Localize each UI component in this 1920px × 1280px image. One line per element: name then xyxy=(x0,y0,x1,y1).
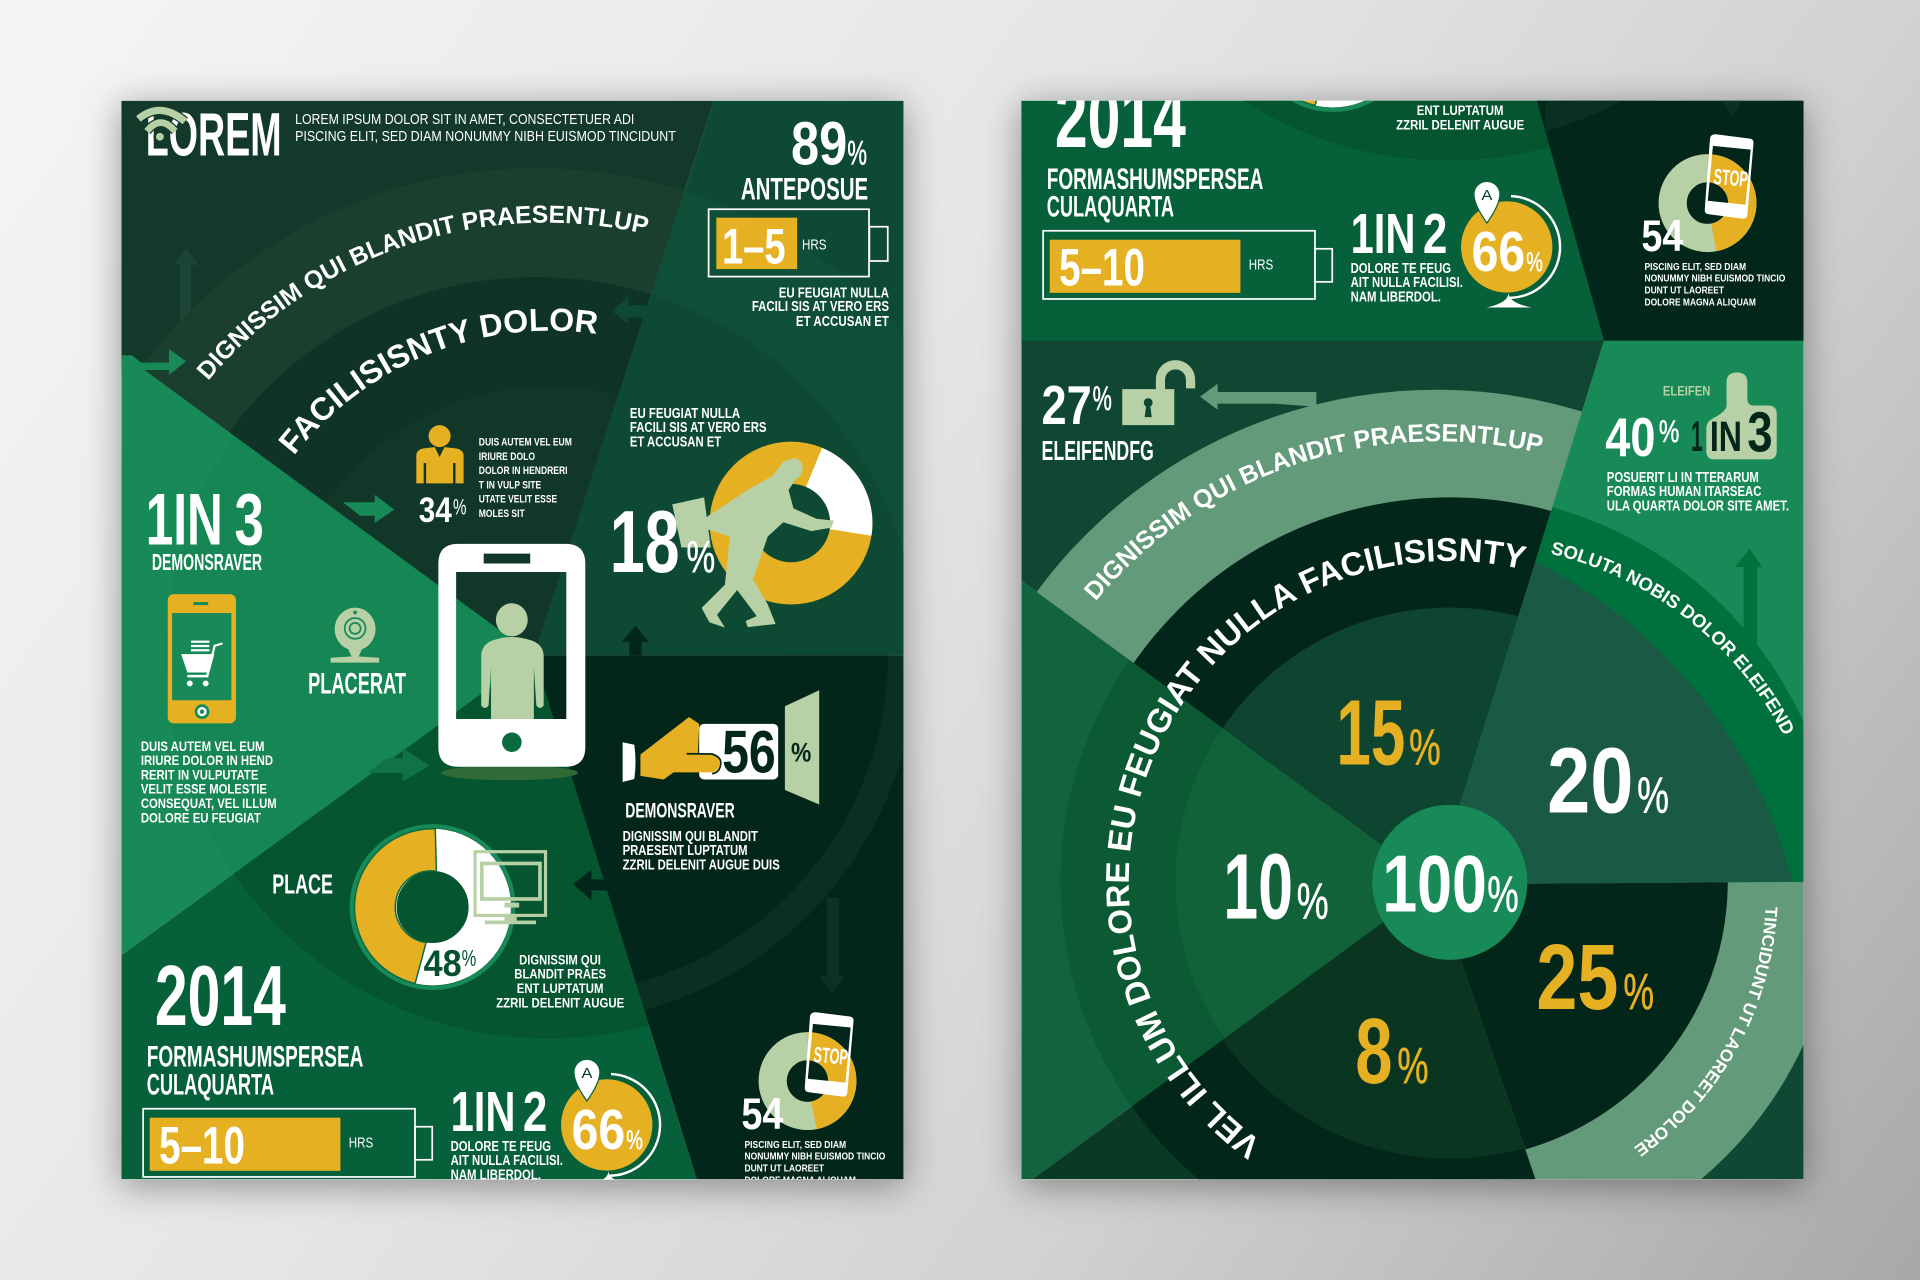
stat: 89% anteposue xyxy=(741,122,868,200)
battery: 5-10 hrs xyxy=(1043,231,1332,299)
chart: 54% donut with stop phone: STOP xyxy=(1713,164,1749,192)
chart centre: 100%: % xyxy=(1487,865,1519,923)
stat: 15%: % xyxy=(1409,717,1441,775)
battery: 5-10 hrs: HRS xyxy=(349,1136,373,1152)
icon: hand with 56% card: 56 xyxy=(722,718,776,785)
stat: 1 in 2: AIT NULLA FACILISI. xyxy=(451,1153,563,1169)
stat: 34%: 34 xyxy=(419,490,452,530)
stat: 18%: 18 xyxy=(610,492,680,591)
text: demonsraver block xyxy=(622,803,780,870)
stat: 1 in 2 xyxy=(1351,202,1463,305)
heading: formas xyxy=(147,1041,363,1101)
chart: donut with carrying man xyxy=(672,448,872,628)
stat: 27% xyxy=(1042,374,1154,466)
background wedge: lower right darkest xyxy=(544,655,904,1180)
text: demonsraver block: DIGNISSIM QUI BLANDIT xyxy=(623,829,758,845)
icon: globe with 66%: A xyxy=(1481,188,1493,204)
background wedge: lower right ring sector xyxy=(1021,341,1839,1271)
text: piscing small: PISCING ELIT, SED DIAM xyxy=(744,1140,846,1151)
text: eu feugiat right: EU FEUGIAT NULLA xyxy=(779,285,889,301)
stat: 27%: ELEIFENDFG xyxy=(1042,435,1154,466)
stat: 25%: % xyxy=(1623,962,1654,1020)
icon: open padlock xyxy=(1122,365,1191,425)
stat: 1 in 2: AIT NULLA FACILISI. xyxy=(1351,275,1463,291)
heading: 2014: 2014 xyxy=(1055,70,1186,166)
background wedge: upper right xyxy=(538,100,904,656)
background wedge: top ring sector xyxy=(1021,341,1834,1266)
battery: 5-10 hrs: HRS xyxy=(1249,258,1273,274)
text: demonsraver block: DEMONSRAVER xyxy=(625,800,735,823)
stat: 54%: % xyxy=(1684,226,1700,248)
icon: wifi xyxy=(138,110,185,142)
stat: 89% anteposue: 89 xyxy=(791,109,847,177)
background wedge: bottom ring sector xyxy=(1021,341,1839,1271)
stat: 25%: 25 xyxy=(1536,925,1618,1029)
text: duis autem small: MOLES SIT xyxy=(479,508,525,520)
text: duis autem paragraph: DOLORE EU FEUGIAT xyxy=(141,810,261,825)
stat: 40%: 40 xyxy=(1605,406,1656,468)
icon: thumb tag xyxy=(1706,372,1777,459)
arrow: left dark xyxy=(612,297,647,323)
continued poster content from the left sheet xyxy=(1043,0,1785,308)
stat: 20%: % xyxy=(1637,765,1669,823)
arrow: faint up right xyxy=(818,350,840,402)
text: eleifen: ELEIFEN xyxy=(1663,383,1710,398)
text: duis autem paragraph: CONSEQUAT, VEL ILLUM xyxy=(141,796,277,811)
stat: 34% xyxy=(419,497,466,522)
battery: 5-10 hrs: 5–10 xyxy=(1059,239,1145,298)
label: placerat: PLACERAT xyxy=(308,667,406,700)
text: dignissim qui centre: BLANDIT PRAES xyxy=(514,966,606,982)
heading: formas: CULAQUARTA xyxy=(147,1068,274,1101)
background: top right dark wedge xyxy=(1537,101,1804,341)
heading: 2014: 2014 xyxy=(155,948,286,1044)
background wedge: top dark xyxy=(121,100,714,644)
icon: gold phone with cart xyxy=(168,594,236,723)
battery: 5-10 hrs: 5–10 xyxy=(159,1116,245,1175)
text: duis autem paragraph xyxy=(141,739,277,825)
text: eu feugiat right: FACILI SIS AT VERO ERS xyxy=(752,299,889,315)
icon: webcam xyxy=(331,608,379,663)
stat: 15%: 15 xyxy=(1336,680,1405,784)
text: dignissim qui remnant: ENT LUPTATUM xyxy=(1417,102,1503,118)
arrow: to lock xyxy=(1200,384,1316,410)
background wedge: left ring sector xyxy=(1021,341,1839,1271)
icon: person gold xyxy=(416,425,464,483)
text: duis autem small: DUIS AUTEM VEL EUM xyxy=(479,436,572,448)
stat: 10%: 10 xyxy=(1223,835,1293,939)
stat: 1 in 2: 1IN xyxy=(451,1080,516,1143)
text: duis autem paragraph: RERIT IN VULPUTATE xyxy=(141,767,258,782)
chart centre: 100%: 100 xyxy=(1382,840,1487,930)
icon: main phone xyxy=(438,544,585,780)
stat: 1 in 2: DOLORE TE FEUG xyxy=(1351,261,1451,277)
text: duis autem small xyxy=(479,436,572,520)
background wedge: left bright green xyxy=(121,356,509,955)
chart: 54% donut with stop phone: STOP xyxy=(813,1042,849,1070)
battery: 1-5 hrs xyxy=(709,209,888,277)
curved heading: vel illum: VEL ILLUM DOLORE EU FEUGIAT NULLA FACILISISNTY xyxy=(1106,538,1527,1160)
text: piscing small: NONUMMY NIBH EUISMOD TINCIO xyxy=(744,1152,885,1163)
stat: 20%: 20 xyxy=(1547,728,1633,832)
logo: LOREM: LOREM xyxy=(146,101,282,169)
heading: formas: FORMASHUMSPERSEA xyxy=(147,1041,363,1074)
stat: 27%: % xyxy=(1093,380,1112,418)
text: piscing small: NONUMMY NIBH EUISMOD TINCIO xyxy=(1644,274,1785,285)
battery: 5-10 hrs xyxy=(143,1109,432,1177)
battery: 1-5 hrs: 1–5 xyxy=(722,218,786,274)
text: piscing small: DOLORE MAGNA ALIQUAM xyxy=(1644,297,1756,308)
header text: PISCING ELIT, SED DIAM NONUMMY NIBH EUISMOD TINCIDUNT xyxy=(295,128,676,145)
text: dignissim qui remnant: ZZRIL DELENIT AUGUE xyxy=(1396,116,1524,132)
stat: 1 in 2 xyxy=(451,1080,563,1183)
chart: 48% donut with monitor: % xyxy=(462,945,476,971)
text: piscing small: DOLORE MAGNA ALIQUAM xyxy=(744,1175,856,1186)
curved label: tincidunt: TINCIDUNT UT LAOREET DOLORE xyxy=(1634,907,1778,1157)
arrow: green up xyxy=(1735,549,1762,652)
arrow: green right top xyxy=(121,349,186,375)
header text: LOREM IPSUM DOLOR SIT IN AMET, CONSECTETUER ADI xyxy=(295,111,634,128)
text: duis autem small: UTATE VELIT ESSE xyxy=(479,494,557,506)
stat: 40%: % xyxy=(1659,413,1679,449)
text: duis autem paragraph: VELIT ESSE MOLESTIE xyxy=(141,782,267,797)
stat: 1 in 3 xyxy=(148,494,262,570)
icon: globe with 66%: % xyxy=(1526,247,1543,277)
stat: 1 in 3: DEMONSRAVER xyxy=(152,549,262,575)
header text xyxy=(296,114,676,143)
arrow: faint down xyxy=(1719,20,1745,115)
text: piscing small: DUNT UT LAOREET xyxy=(744,1164,825,1175)
stat: 1 in 2: NAM LIBERDOL. xyxy=(1351,289,1441,305)
text: eu feugiat centre: ET ACCUSAN ET xyxy=(630,434,721,450)
stat: 1 in 3: 3 xyxy=(234,477,264,560)
text: piscing small xyxy=(744,1140,885,1186)
text: posuerit xyxy=(1607,470,1789,514)
curved heading: facilisisnty: FACILISISNTY DOLOR xyxy=(278,308,597,454)
stat: 1 in 3 dark: 3 xyxy=(1747,401,1773,464)
stat: 1 in 2: 2 xyxy=(523,1080,547,1143)
stat: 1 in 3 dark: IN xyxy=(1710,413,1742,461)
chart centre: 100% xyxy=(1372,805,1527,960)
arrow: faint down xyxy=(819,898,845,993)
icon: globe with 66%: A xyxy=(581,1066,593,1082)
text: eu feugiat centre xyxy=(630,408,766,446)
text: duis autem small: T IN VULP SITE xyxy=(479,479,541,491)
icon: hand with 56% card: % xyxy=(791,738,811,768)
chart: 48% donut remnant xyxy=(1252,0,1413,110)
text: eu feugiat centre: EU FEUGIAT NULLA xyxy=(630,406,740,422)
text: dignissim qui centre: ZZRIL DELENIT AUGUE xyxy=(496,994,624,1010)
text: dignissim qui remnant xyxy=(1396,88,1524,132)
stat: 27%: 27 xyxy=(1042,374,1092,436)
stat: 89% anteposue: % xyxy=(847,134,867,172)
stat: 1 in 3 dark xyxy=(1691,401,1773,464)
stat: 8%: % xyxy=(1397,1036,1428,1094)
stat: 1 in 2: 1IN xyxy=(1351,202,1416,265)
heading: formas: FORMASHUMSPERSEA xyxy=(1047,163,1263,196)
curved label: soluta: SOLUTA NOBIS DOLOR ELEIFEND xyxy=(1551,542,1793,734)
arrow: green to person xyxy=(343,495,394,523)
background wedge: bottom green xyxy=(121,668,697,1180)
arrow: to phone xyxy=(367,748,430,781)
text: dignissim qui centre: ENT LUPTATUM xyxy=(517,980,603,996)
chart: 48% donut with monitor: 48 xyxy=(424,943,462,984)
stat: 34%: % xyxy=(453,494,467,519)
heading: formas xyxy=(1047,163,1263,223)
stat: 54%: 54 xyxy=(1641,212,1684,261)
curved heading: dignissim: DIGNISSIM QUI BLANDIT PRAESENTLUP xyxy=(196,205,648,380)
stat: 1 in 3: 1IN xyxy=(146,477,223,560)
text: demonsraver block: ZZRIL DELENIT AUGUE DUIS xyxy=(623,857,780,873)
icon: globe with 66% xyxy=(561,1059,660,1186)
icon: globe with 66%: 66 xyxy=(572,1098,625,1161)
percent sign: 18%: % xyxy=(686,533,715,582)
stat: 1 in 2: 2 xyxy=(1423,202,1447,265)
stat: 1 in 3 dark: 1 xyxy=(1691,413,1703,461)
icon: hand with 56% card xyxy=(623,690,819,804)
chart: 54% donut with stop phone xyxy=(1673,134,1756,251)
chart: 48% donut with monitor xyxy=(352,826,546,988)
text: eu feugiat right xyxy=(752,288,889,326)
stat: 10%: % xyxy=(1297,872,1329,930)
background: top green block xyxy=(1021,101,1804,342)
text: demonsraver block: PRAESENT LUPTATUM xyxy=(623,843,748,859)
text: piscing small: PISCING ELIT, SED DIAM xyxy=(1644,262,1746,273)
text: eu feugiat right: ET ACCUSAN ET xyxy=(796,314,889,330)
text: piscing small: DUNT UT LAOREET xyxy=(1644,286,1725,297)
stat: 1 in 2: DOLORE TE FEUG xyxy=(451,1139,551,1155)
label: place: PLACE xyxy=(272,869,333,900)
panel: left poster xyxy=(121,100,904,1180)
text: posuerit: POSUERIT LI IN TTERARUM xyxy=(1607,470,1759,486)
arrow: dark left xyxy=(573,870,609,900)
background: faint ring in dark wedge xyxy=(1545,101,1622,131)
stat: 8%: 8 xyxy=(1355,999,1392,1103)
text: dignissim qui remnant: BLANDIT PRAES xyxy=(1414,88,1506,104)
battery: 1-5 hrs: HRS xyxy=(802,237,827,253)
text: dignissim qui centre xyxy=(496,951,624,1010)
icon: globe with 66% xyxy=(1461,181,1560,308)
arrow: faint up left xyxy=(174,248,198,321)
text: duis autem small: IRIURE DOLO xyxy=(479,451,535,463)
background wedge: right ring sector xyxy=(1021,341,1838,1270)
icon: globe with 66%: % xyxy=(626,1125,643,1155)
stat: 1 in 2: NAM LIBERDOL. xyxy=(451,1167,541,1183)
stat: 89% anteposue: ANTEPOSUE xyxy=(741,170,868,206)
curved heading: dignissim: DIGNISSIM QUI BLANDIT PRAESENTLUP xyxy=(1084,424,1543,600)
arrow: dark up xyxy=(622,626,649,655)
chart: 54% donut with stop phone xyxy=(773,1012,856,1129)
stat: 54%: 54 xyxy=(741,1090,784,1139)
text: posuerit: FORMAS HUMAN ITARSEAC xyxy=(1607,484,1762,500)
text: piscing small xyxy=(1644,262,1785,308)
text: dignissim qui centre: DIGNISSIM QUI xyxy=(519,951,601,967)
text: duis autem small: DOLOR IN HENDRERI xyxy=(479,465,568,477)
text: eu feugiat centre: FACILI SIS AT VERO ERS xyxy=(630,420,767,436)
background: disc remnant xyxy=(1243,101,1654,160)
icon: globe with 66%: 66 xyxy=(1472,220,1525,283)
text: posuerit: ULA QUARTA DOLOR SITE AMET. xyxy=(1607,498,1789,514)
text: duis autem paragraph: IRIURE DOLOR IN HEND xyxy=(141,753,273,768)
heading: formas: CULAQUARTA xyxy=(1047,190,1174,223)
stat: 54%: % xyxy=(784,1104,800,1126)
text: duis autem paragraph: DUIS AUTEM VEL EUM xyxy=(141,739,264,754)
panel: right poster xyxy=(1021,100,1804,1180)
